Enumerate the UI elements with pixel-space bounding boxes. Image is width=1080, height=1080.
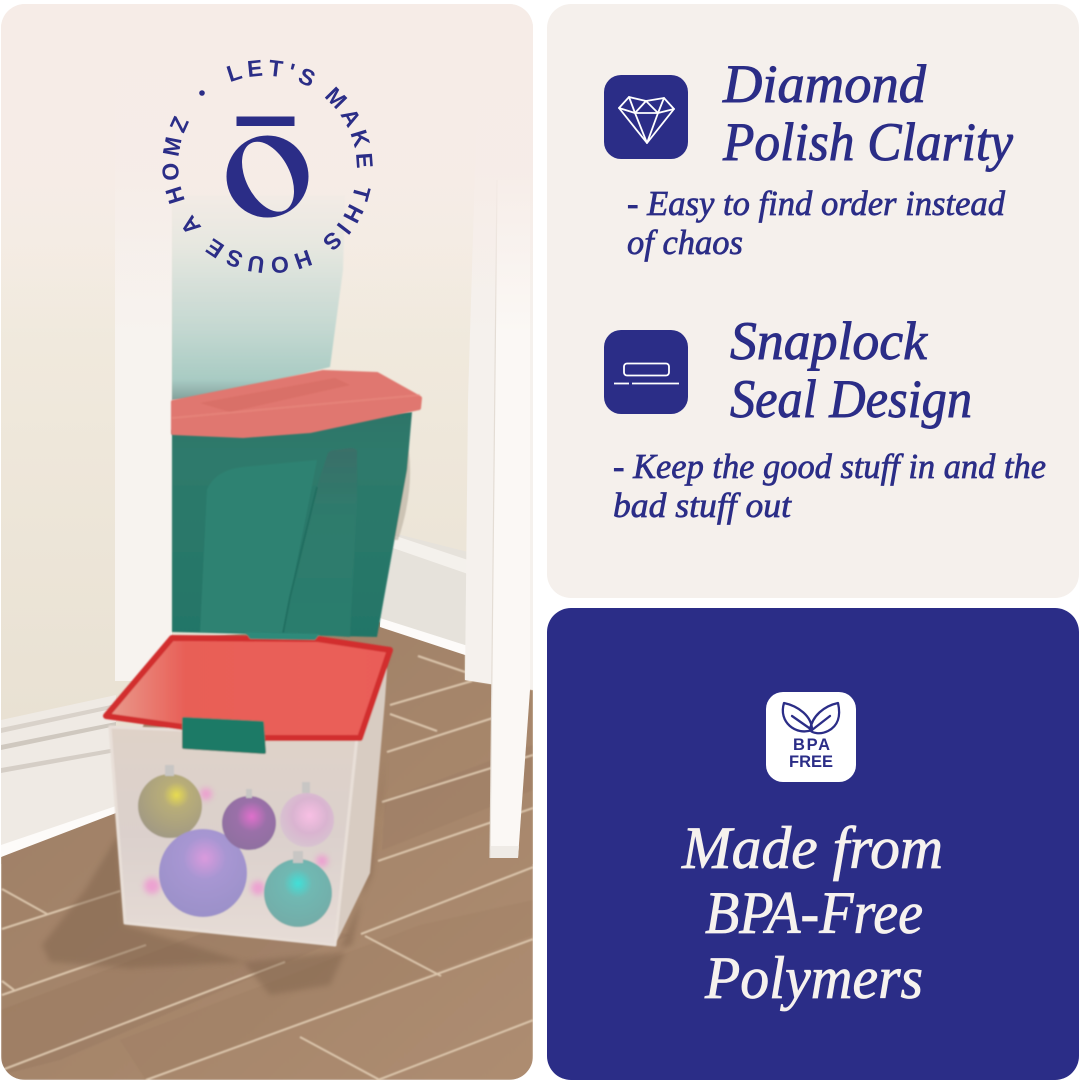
bauble: gold [138,774,202,838]
heading: snaplock seal design [730,311,972,429]
floor shadows [43,801,383,994]
heading: snaplock seal design: Snaplock [730,311,928,371]
bauble: teal [264,859,332,927]
box lid [106,638,390,738]
bauble caps [165,765,310,863]
text: diamond description: of chaos [627,223,743,262]
icon: bpa free leaves [766,692,856,782]
green bin [172,412,412,637]
panel: bpa free [547,608,1079,1080]
left baseboard [1,695,116,857]
text: snaplock description: - Keep the good stuff in and the [613,447,1046,486]
icon: bpa free leaves: BPA [793,736,830,754]
heading: snaplock seal design: Seal Design [730,369,972,429]
slogan dot [199,90,205,96]
door trim left [115,247,172,681]
lid centre tab [245,632,320,640]
upper translucent bin [171,221,344,400]
teal latch [184,719,264,752]
icon: diamond [604,75,688,159]
logo badge [162,60,373,273]
clear storage box [106,632,390,945]
text: snaplock description [613,447,1046,525]
bauble: large lavender [159,829,247,917]
text: diamond description: - Easy to find order instead [627,184,1005,223]
heading: made from bpa-free polymers [681,815,943,1011]
text: diamond description [627,184,1005,262]
box side [335,655,388,945]
wall [1,202,533,864]
heading: diamond polish clarity: Polish Clarity [722,112,1013,172]
heading: made from bpa-free polymers: Polymers [704,945,923,1011]
pink glows [144,788,328,895]
heading: diamond polish clarity [722,54,1013,172]
bauble: small plum [222,796,276,850]
right baseboard [380,533,468,656]
floor [1,622,536,1080]
circular slogan: LET'S MAKE THIS HOUSE A HOMZ [162,60,373,273]
icon: snaplock seal [604,330,688,414]
coral lid [172,372,420,436]
heading: made from bpa-free polymers: Made from [681,815,943,881]
icon: bpa free leaves: FREE [789,753,833,771]
heading: made from bpa-free polymers: BPA-Free [705,880,923,946]
text: snaplock description: bad stuff out [613,486,792,525]
bauble: pink [280,793,334,847]
heading: diamond polish clarity: Diamond [722,54,927,114]
letter o mark [226,136,308,218]
macron bar [236,116,294,126]
panel: features [547,4,1079,598]
door trim right [465,226,533,858]
panel: product photo [1,4,536,1080]
top fade overlay [496,180,530,250]
box front [110,727,357,945]
